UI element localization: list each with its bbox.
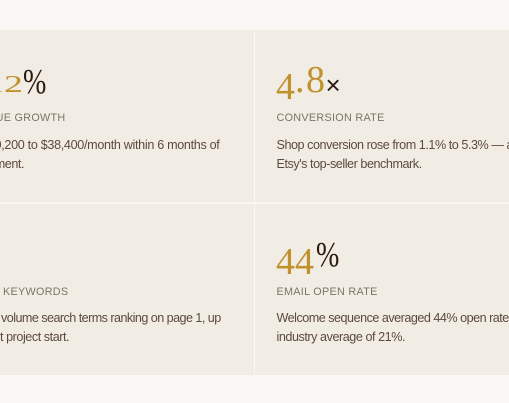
stat: 44% <box>276 235 339 283</box>
stat: 312%: 2 <box>4 71 23 98</box>
label: email open rate: EMAIL OPEN RATE <box>276 286 378 298</box>
label: keywords: KEYWORDS <box>3 286 68 298</box>
panel: email open rate <box>255 204 509 375</box>
description: conversion rate: Etsy's top-seller benchmark. <box>276 157 422 171</box>
label: conversion rate: CONVERSION RATE <box>276 112 385 124</box>
panel: keywords <box>0 204 254 375</box>
stat: 312%: % <box>23 62 46 103</box>
stat: 4.8x: 4.8 <box>276 59 325 108</box>
panel: conversion rate <box>255 30 509 202</box>
description: keywords: volume search terms ranking on page 1, up <box>1 311 221 325</box>
description: keywords: t project start. <box>0 330 69 344</box>
description: keywords <box>0 311 221 344</box>
description: conversion rate <box>276 138 509 171</box>
symbol: multiply: × <box>326 70 341 100</box>
description: email open rate <box>276 311 509 344</box>
description: email open rate: industry average of 21%. <box>276 330 405 344</box>
stat: 44%: 44 <box>276 241 314 283</box>
stat: 44%: % <box>316 235 339 276</box>
panel: revenue growth <box>0 30 254 202</box>
stat: 312% <box>0 62 46 103</box>
